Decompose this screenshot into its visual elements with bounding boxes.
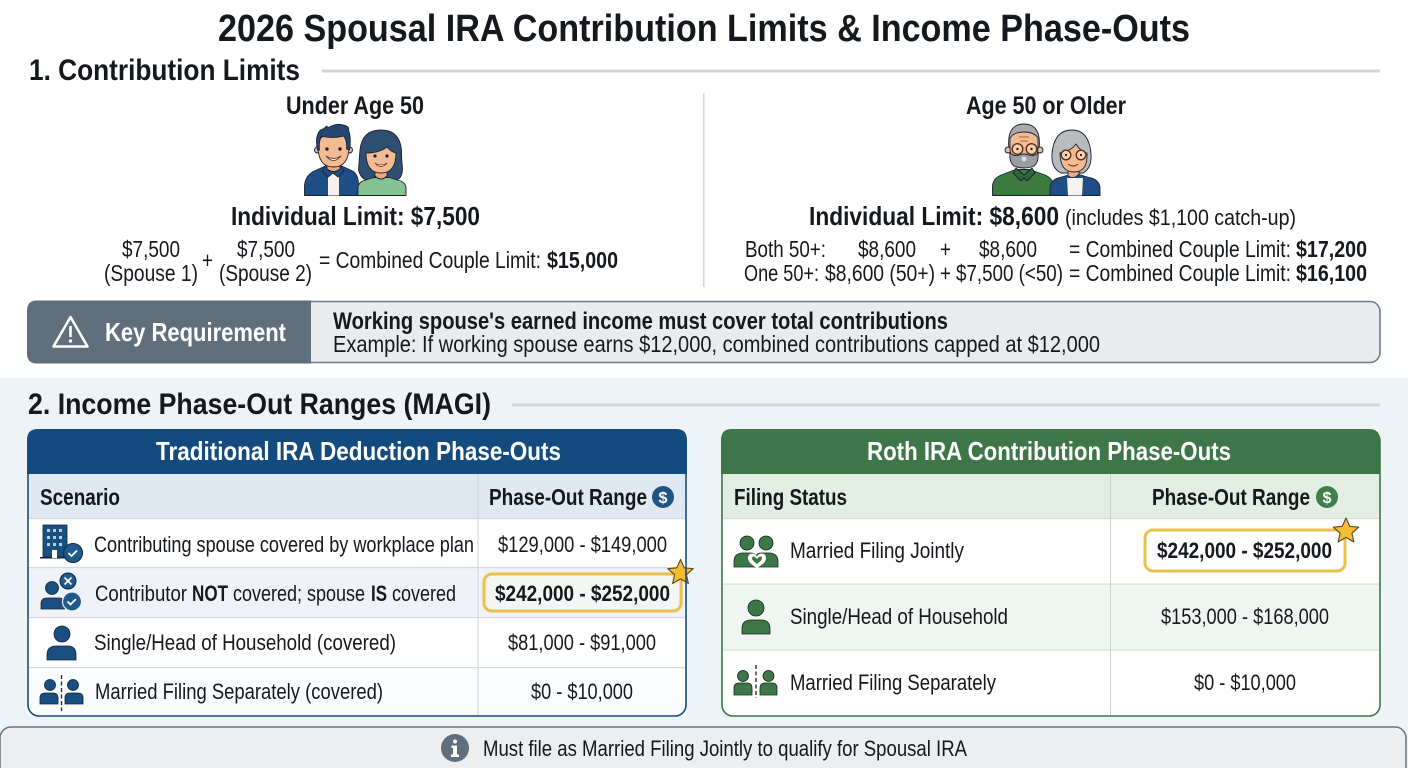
icon: building with check [40, 525, 82, 562]
highlighted range: $242,000 - $252,000 [495, 581, 670, 606]
row: married filing separately: Married Filing Separately [790, 670, 997, 695]
equation: one 50+: $7,500 (<50) [956, 260, 1063, 286]
row: married filing jointly: Married Filing Jointly [790, 538, 965, 563]
heading: under age 50: Under Age 50 [286, 92, 424, 120]
icon: dollar badge: $ [1322, 490, 1332, 507]
icon: couple with heart [734, 536, 778, 568]
row: contributor not covered: Contributor [95, 581, 187, 606]
equation: spouse 1 plus spouse 2: $15,000 [547, 247, 618, 273]
row: contributor not covered: covered; spouse [233, 581, 365, 606]
row: single head of household covered: Single/Head of Household (covered) [94, 630, 396, 655]
column headings [28, 474, 686, 518]
footer note: Must file as Married Filing Jointly to qualify for Spousal IRA [483, 736, 967, 761]
section heading: income phase-out ranges [28, 388, 1380, 421]
row: contributor not covered: covered [392, 581, 456, 606]
equation: both 50+ [745, 236, 1367, 262]
equation: spouse 1 plus spouse 2: $7,500 [237, 236, 295, 262]
icon: dollar badge [1316, 486, 1338, 508]
equation: spouse 1 plus spouse 2: $7,500 [122, 236, 180, 262]
icon: people with x and check [41, 573, 82, 611]
highlighted range [1145, 518, 1359, 571]
column headings: Filing Status [734, 484, 847, 510]
icon: young couple [304, 124, 406, 196]
icon: dollar badge: $ [658, 490, 668, 507]
icon: info [441, 734, 469, 762]
row: workplace plan: $129,000 - $149,000 [498, 532, 667, 557]
icon: star [1333, 518, 1359, 542]
equation: both 50+: $17,200 [1296, 236, 1367, 262]
row: married filing separately covered: Married Filing Separately (covered) [95, 679, 383, 704]
equation: both 50+: $8,600 [858, 236, 916, 262]
row: married filing separately covered [40, 675, 633, 711]
icon: dollar badge [652, 486, 674, 508]
equation: spouse 1 plus spouse 2 [104, 236, 618, 286]
icon: separated people [734, 665, 777, 698]
column headings: Scenario [40, 484, 120, 510]
row: married filing separately [734, 665, 1296, 698]
icon: warning triangle [54, 317, 88, 346]
column headings [722, 474, 1380, 518]
callout: key requirement: Example: If working spouse earns $12,000, combined contributions capped at $12,000 [333, 331, 1100, 357]
panel: roth IRA table [721, 429, 1380, 716]
equation: one 50+: + [940, 260, 951, 286]
footer note [0, 727, 1406, 768]
row: single head of household: $153,000 - $168,000 [1161, 604, 1329, 629]
row: single head of household covered [47, 626, 656, 660]
heading: age 50 or older: Age 50 or Older [966, 92, 1126, 120]
row: workplace plan: Contributing spouse covered by workplace plan [94, 532, 474, 557]
equation: spouse 1 plus spouse 2: (Spouse 1) [104, 260, 198, 286]
callout: key requirement [27, 300, 1380, 364]
column headings: Phase-Out Range [489, 484, 647, 510]
equation: one 50+: = Combined Couple Limit: [1069, 260, 1291, 286]
icon: older couple [992, 124, 1100, 196]
row: single head of household: Single/Head of Household [790, 604, 1008, 629]
equation: both 50+: = Combined Couple Limit: [1069, 236, 1291, 262]
section heading: contribution limits: 1. Contribution Limits [29, 54, 300, 87]
column headings: Phase-Out Range [1152, 484, 1310, 510]
section heading: income phase-out ranges: 2. Income Phase-Out Ranges (MAGI) [28, 388, 491, 421]
individual limit with catch-up: Individual Limit: $8,600 [809, 201, 1059, 231]
icon: star [668, 560, 693, 584]
row: contributor not covered: IS [371, 581, 387, 606]
panel: age 50 or older [744, 92, 1367, 286]
table header: Roth IRA Contribution Phase-Outs [867, 436, 1231, 466]
table header: Traditional IRA Deduction Phase-Outs [156, 436, 561, 466]
row: contributor not covered [41, 560, 693, 611]
equation: one 50+ [744, 260, 1367, 286]
row: single head of household [742, 600, 1329, 634]
equation: both 50+: $8,600 [979, 236, 1037, 262]
equation: one 50+: $16,100 [1296, 260, 1367, 286]
equation: both 50+: + [940, 236, 951, 262]
equation: one 50+: $8,600 (50+) [825, 260, 935, 286]
callout: key requirement: Working spouse's earned income must cover total contributions [333, 308, 948, 335]
highlighted range [484, 560, 693, 611]
icon: person [742, 600, 770, 634]
icon: person [47, 626, 76, 660]
row: single head of household covered: $81,000 - $91,000 [508, 630, 656, 655]
row: contributor not covered: NOT [192, 581, 228, 606]
table header [721, 429, 1380, 474]
row: workplace plan [40, 525, 667, 562]
individual limit with catch-up: (includes $1,100 catch-up) [1065, 205, 1296, 230]
individual limit: Individual Limit: $7,500 [231, 201, 480, 231]
row: married filing jointly [734, 518, 1359, 571]
equation: one 50+: One 50+: [744, 260, 819, 286]
individual limit with catch-up [809, 201, 1296, 231]
equation: spouse 1 plus spouse 2: + [202, 247, 213, 273]
equation: spouse 1 plus spouse 2: = Combined Couple Limit: [319, 247, 541, 273]
row: married filing separately covered: $0 - $10,000 [531, 679, 633, 704]
equation: both 50+: Both 50+: [745, 236, 826, 262]
equation: spouse 1 plus spouse 2: (Spouse 2) [219, 260, 312, 286]
row: married filing separately: $0 - $10,000 [1194, 670, 1296, 695]
callout: key requirement: Key Requirement [105, 317, 286, 347]
panel: traditional IRA table [27, 429, 693, 716]
title: 2026 Spousal IRA Contribution Limits & Income Phase-Outs [218, 8, 1190, 50]
section heading: contribution limits [29, 54, 1380, 87]
panel: under age 50 [104, 92, 618, 286]
icon: separated people [40, 675, 83, 711]
table header [27, 429, 687, 474]
highlighted range: $242,000 - $252,000 [1157, 538, 1332, 563]
